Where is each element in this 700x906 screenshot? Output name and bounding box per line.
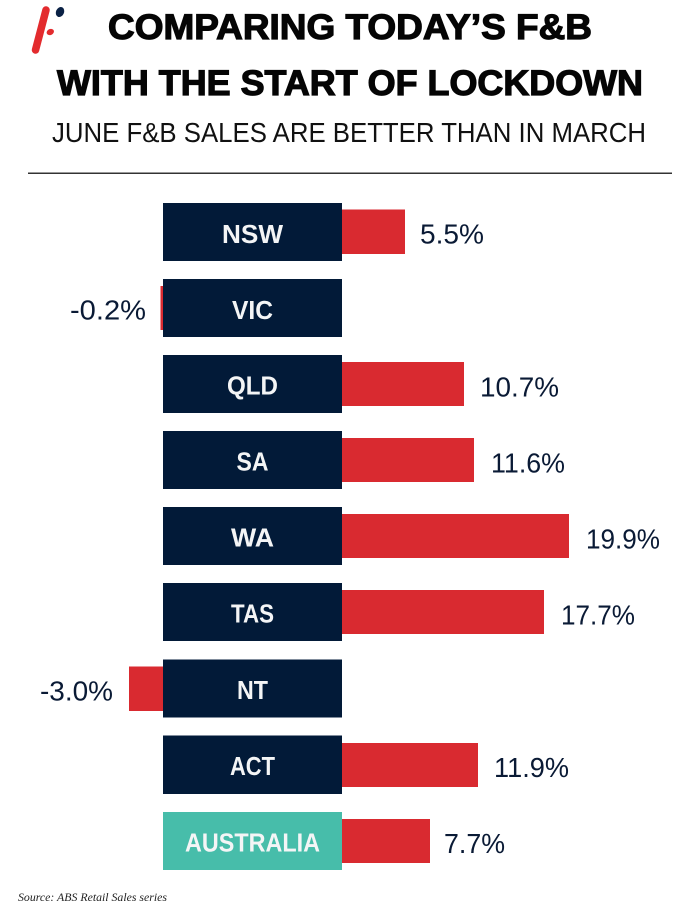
row: NT: -3.0% (40, 676, 113, 706)
title: WITH THE START OF LOCKDOWN (57, 64, 643, 103)
logo (36, 6, 66, 50)
row: WA (163, 507, 660, 565)
source note: Source: ABS Retail Sales series (18, 892, 168, 904)
row: AUSTRALIA (163, 812, 505, 870)
row: QLD (163, 355, 559, 413)
row: NSW (163, 203, 484, 261)
row: SA (163, 431, 565, 489)
row: WA: 19.9% (586, 524, 660, 554)
row: NT (40, 660, 342, 718)
row: NSW: NSW (222, 221, 284, 249)
row: ACT: 11.9% (494, 752, 569, 783)
row: AUSTRALIA: 7.7% (444, 828, 505, 859)
bar chart (40, 203, 660, 870)
row: SA: SA (236, 448, 268, 476)
row: VIC (70, 279, 342, 337)
row: SA: 11.6% (491, 448, 565, 478)
row: NSW: 5.5% (420, 218, 484, 250)
row: WA: WA (231, 524, 274, 552)
row: QLD: QLD (227, 372, 278, 400)
row: ACT (163, 736, 569, 794)
row: ACT: ACT (230, 753, 275, 781)
row: QLD: 10.7% (480, 372, 559, 402)
subtitle: JUNE F&B SALES ARE BETTER THAN IN MARCH (52, 117, 646, 148)
title (57, 8, 643, 103)
row: TAS (163, 583, 635, 641)
row: TAS: TAS (231, 600, 274, 628)
row: VIC: VIC (232, 297, 273, 325)
row: TAS: 17.7% (561, 600, 635, 630)
row: AUSTRALIA: AUSTRALIA (185, 830, 320, 858)
title: COMPARING TODAY’S F&B (108, 8, 592, 47)
row: NT: NT (237, 677, 268, 705)
row: VIC: -0.2% (70, 294, 146, 326)
